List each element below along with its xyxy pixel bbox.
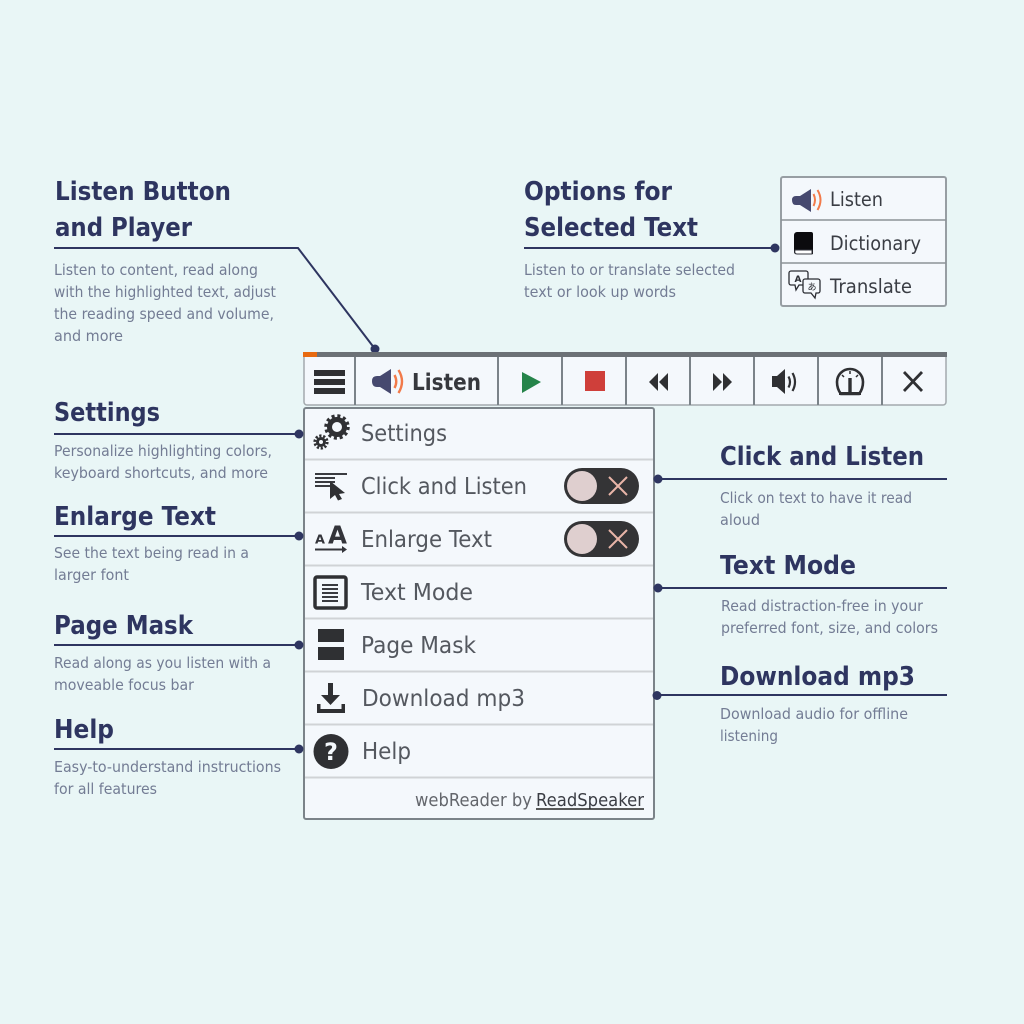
callout: text mode	[654, 551, 947, 637]
label: Settings	[361, 421, 447, 447]
label: Help	[362, 739, 411, 765]
option label: dictionary: Dictionary	[830, 232, 921, 255]
icon: help: ?	[324, 738, 338, 766]
label: Page Mask	[361, 633, 477, 659]
icon: translate: A	[795, 275, 802, 285]
callout: listen button and player: and more	[54, 327, 123, 345]
callout: settings: keyboard shortcuts, and more	[54, 464, 268, 482]
callout: download mp3: Download audio for offline	[720, 705, 908, 723]
callout: page mask: Page Mask	[54, 611, 194, 641]
callout: settings: Settings	[54, 398, 160, 428]
callout: options for selected text	[524, 177, 780, 301]
callout: help	[54, 715, 304, 798]
icon: listen speaker	[372, 369, 402, 394]
menu item: download mp3	[317, 683, 525, 713]
menu item: click and listen	[315, 468, 639, 504]
option label: listen: Listen	[830, 188, 883, 211]
callout: enlarge text: Enlarge Text	[54, 502, 216, 532]
callout: enlarge text	[54, 502, 304, 584]
icon: rewind	[649, 373, 668, 391]
icon: menu	[314, 370, 345, 394]
icon: speed dial	[837, 369, 863, 394]
callout: download mp3: listening	[720, 727, 778, 745]
callout: click and listen	[654, 442, 947, 529]
callout: click and listen: Click on text to have it read	[720, 489, 912, 507]
icon: translate	[789, 271, 820, 298]
callout: listen button and player: Listen Button	[55, 177, 231, 207]
callout: enlarge text: See the text being read in a	[54, 544, 249, 562]
callout: options for selected text: Options for	[524, 177, 672, 207]
panel: selected text options	[781, 177, 946, 306]
callout: listen button and player: Listen to content, read along	[54, 261, 258, 279]
toolbar label: listen: Listen	[412, 368, 481, 396]
callout: settings	[54, 398, 304, 482]
callout: options for selected text: text or look up words	[524, 283, 676, 301]
callout: click and listen: aloud	[720, 511, 760, 529]
callout: help: Easy-to-understand instructions	[54, 758, 281, 776]
callout: listen button and player	[54, 177, 380, 354]
callout: enlarge text: larger font	[54, 566, 129, 584]
callout: page mask: Read along as you listen with a	[54, 654, 271, 672]
label: Click and Listen	[361, 474, 527, 500]
menu item: text mode	[315, 577, 473, 608]
callout: options for selected text: Listen to or translate selected	[524, 261, 735, 279]
callout: download mp3: Download mp3	[720, 662, 915, 692]
option label: translate: Translate	[829, 275, 912, 298]
icon: play	[522, 372, 541, 393]
callout: listen button and player: with the highlighted text, adjust	[54, 283, 276, 301]
menu item: page mask	[318, 629, 477, 660]
icon: text cursor	[315, 473, 347, 500]
toggle	[564, 521, 639, 557]
icon: fast forward	[713, 373, 732, 391]
icon: speaker	[792, 189, 820, 212]
attribution	[415, 791, 645, 811]
label: Text Mode	[360, 580, 473, 606]
callout: help: for all features	[54, 780, 157, 798]
icon: gears	[315, 416, 348, 448]
icon: page mask	[318, 629, 344, 660]
callout: listen button and player: the reading speed and volume,	[54, 305, 274, 323]
panel: settings menu	[304, 408, 654, 819]
icon: close	[904, 372, 922, 391]
icon: enlarge text	[315, 520, 348, 553]
icon: dictionary	[794, 232, 813, 254]
attribution: webReader by	[415, 791, 532, 811]
callout: text mode: Read distraction-free in your	[721, 597, 924, 615]
icon: enlarge text: A	[315, 532, 325, 546]
callout: text mode: Text Mode	[720, 551, 856, 581]
callout: listen button and player: and Player	[55, 213, 192, 243]
menu item: enlarge text	[315, 520, 639, 557]
label: Enlarge Text	[361, 527, 492, 553]
icon: stop	[585, 371, 605, 391]
icon: volume	[772, 369, 795, 394]
icon: enlarge text: A	[328, 520, 348, 550]
callout: page mask: moveable focus bar	[54, 676, 195, 694]
callout: click and listen: Click and Listen	[720, 442, 924, 472]
icon: document	[315, 577, 346, 608]
icon: translate: あ	[807, 280, 817, 293]
attribution: ReadSpeaker	[536, 791, 645, 811]
label: Download mp3	[362, 686, 525, 712]
callout: options for selected text: Selected Text	[524, 213, 698, 243]
callout: help: Help	[54, 715, 114, 745]
callout: download mp3	[652, 662, 947, 745]
icon: download	[317, 683, 345, 713]
toggle	[564, 468, 639, 504]
callout: text mode: preferred font, size, and colors	[721, 619, 938, 637]
menu item: help	[314, 734, 411, 769]
menu item: settings	[315, 416, 447, 448]
player toolbar	[303, 352, 947, 405]
callout: page mask	[54, 611, 304, 694]
callout: settings: Personalize highlighting colors,	[54, 442, 272, 460]
